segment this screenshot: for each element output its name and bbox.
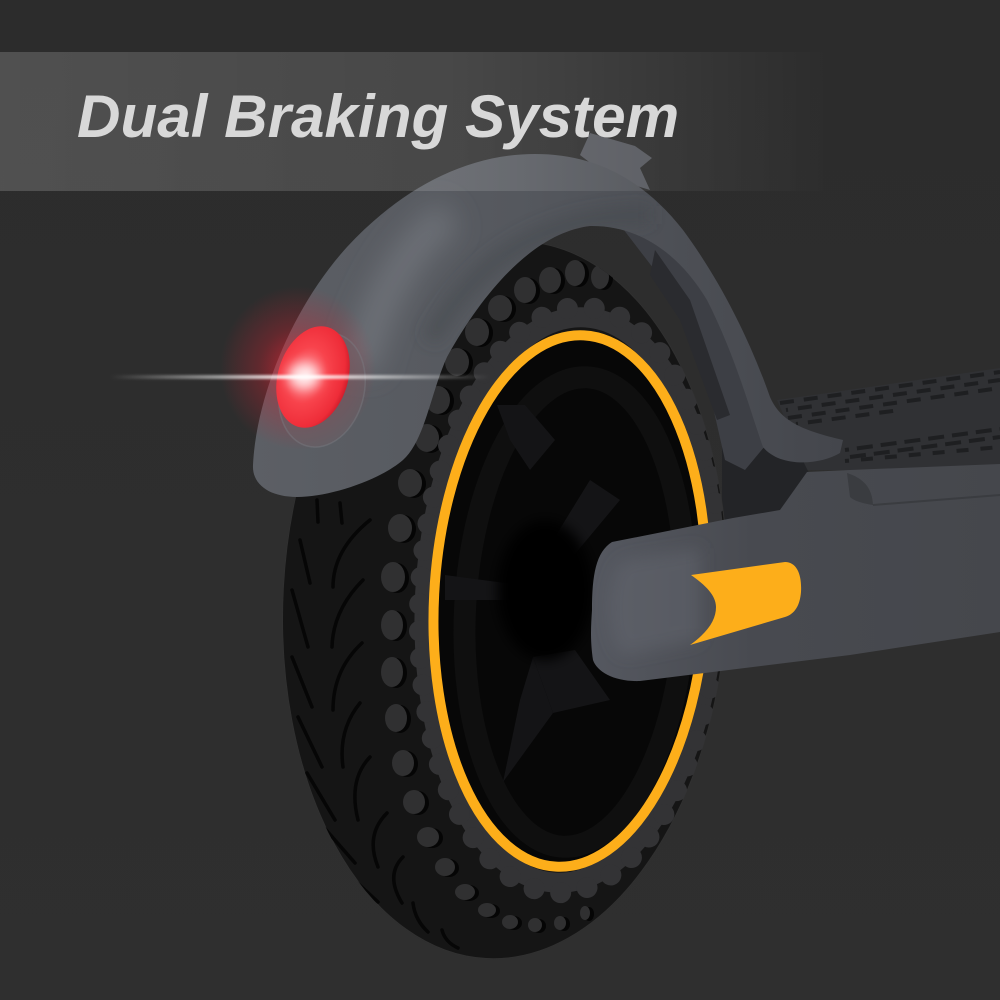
fender bracket	[580, 133, 652, 190]
rear fender	[253, 154, 843, 497]
stud shadows	[385, 261, 613, 933]
arm ridge	[847, 473, 873, 505]
tire	[265, 230, 745, 970]
header band	[0, 52, 830, 191]
hub ring	[453, 372, 697, 852]
hub centre	[497, 520, 593, 660]
under-fender bracket	[722, 440, 810, 525]
spoke panels	[445, 405, 620, 782]
orange rim ring	[420, 328, 720, 874]
scooter arm	[591, 464, 1000, 681]
arm shoulder line	[873, 495, 1000, 505]
stud row	[381, 260, 609, 932]
light flare	[110, 375, 490, 379]
title: Dual Braking System	[77, 83, 679, 150]
lamp hot spot	[288, 363, 320, 389]
rear wheel	[283, 244, 724, 958]
orange tab	[690, 562, 801, 645]
tread leaf grooves	[292, 500, 458, 948]
wheel hub	[421, 330, 719, 874]
inner fender surface	[620, 225, 770, 470]
lamp lens	[264, 317, 362, 437]
lamp recess	[266, 323, 378, 457]
tail light	[110, 286, 490, 457]
scalloped tread ring	[405, 300, 735, 900]
scooter deck	[777, 368, 1000, 470]
arm end cap	[609, 548, 700, 655]
